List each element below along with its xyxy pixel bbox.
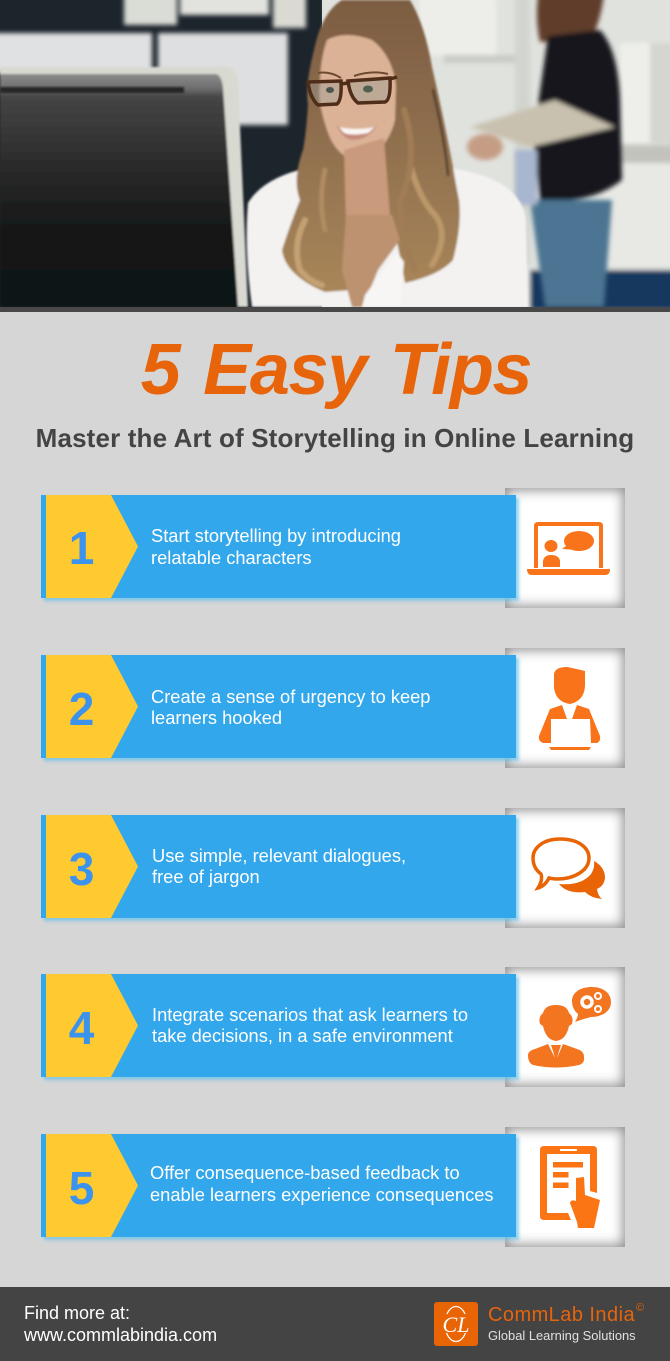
bar 5 bbox=[41, 1134, 516, 1237]
icon: person with laptop bbox=[538, 667, 600, 750]
subtitle: Master the Art of Storytelling in Online Learning bbox=[36, 423, 634, 453]
bar 3 bbox=[41, 815, 516, 918]
text 2 bbox=[151, 686, 430, 728]
text 5: Offer consequence-based feedback to bbox=[150, 1162, 460, 1183]
text 2: learners hooked bbox=[151, 707, 282, 728]
tile 1 bbox=[505, 488, 625, 608]
bar 4 bbox=[41, 974, 516, 1077]
logo tagline: Global Learning Solutions bbox=[488, 1328, 636, 1343]
text 5 bbox=[150, 1162, 494, 1205]
logo mark bbox=[434, 1302, 478, 1346]
number 2: 2 bbox=[69, 683, 94, 735]
tip 3 bbox=[41, 808, 625, 928]
tip 5 bbox=[41, 1127, 625, 1247]
chevron 1 bbox=[46, 495, 138, 598]
footer band bbox=[0, 1287, 670, 1361]
monitor bbox=[0, 67, 248, 307]
text 4: Integrate scenarios that ask learners to bbox=[152, 1004, 468, 1025]
text 4 bbox=[152, 1004, 468, 1046]
text 3: free of jargon bbox=[152, 866, 260, 886]
tip 2 bbox=[41, 648, 625, 768]
bar 1 bbox=[41, 495, 516, 598]
copyright mark: © bbox=[636, 1302, 644, 1314]
photo: woman at computer in office bbox=[0, 0, 670, 307]
logo mark: CL bbox=[443, 1312, 469, 1337]
tile 3 bbox=[505, 808, 625, 928]
number 5: 5 bbox=[69, 1162, 94, 1214]
tile 5 bbox=[505, 1127, 625, 1247]
text 3 bbox=[152, 844, 406, 887]
logo name: CommLab India bbox=[488, 1304, 635, 1326]
text 3: Use simple, relevant dialogues, bbox=[152, 844, 406, 866]
tile 2 bbox=[505, 648, 625, 768]
icon: businessman with gears bubble bbox=[528, 987, 611, 1068]
icon: hand tapping tablet bbox=[540, 1146, 600, 1228]
number 4: 4 bbox=[69, 1002, 94, 1054]
text 4: take decisions, in a safe environment bbox=[152, 1025, 453, 1046]
title: 5 Easy Tips bbox=[141, 330, 531, 410]
chevron 3 bbox=[46, 815, 138, 918]
hair highlights bbox=[297, 90, 448, 285]
icon: presenter on laptop bbox=[527, 522, 610, 575]
tile 4 bbox=[505, 967, 625, 1087]
glasses bbox=[308, 72, 397, 105]
bar 2 bbox=[41, 655, 516, 758]
text 2: Create a sense of urgency to keep bbox=[151, 686, 430, 707]
dark divider bar bbox=[0, 307, 670, 312]
tip 1 bbox=[41, 488, 625, 608]
woman bbox=[247, 0, 528, 307]
text 1: Start storytelling by introducing bbox=[151, 525, 401, 546]
tip 4 bbox=[41, 967, 625, 1087]
text 1: relatable characters bbox=[151, 547, 312, 568]
footer text: www.commlabindia.com bbox=[24, 1325, 217, 1345]
footer text: Find more at: bbox=[24, 1303, 130, 1323]
icon: speech bubbles bbox=[531, 837, 605, 899]
text 1 bbox=[151, 525, 401, 568]
text 5: enable learners experience consequences bbox=[150, 1184, 494, 1205]
background colleague bbox=[467, 0, 622, 307]
number 1: 1 bbox=[69, 522, 94, 574]
chevron 4 bbox=[46, 974, 138, 1077]
chevron 2 bbox=[46, 655, 138, 758]
chevron 5 bbox=[46, 1134, 138, 1237]
footer text bbox=[24, 1303, 217, 1345]
number 3: 3 bbox=[69, 843, 94, 895]
